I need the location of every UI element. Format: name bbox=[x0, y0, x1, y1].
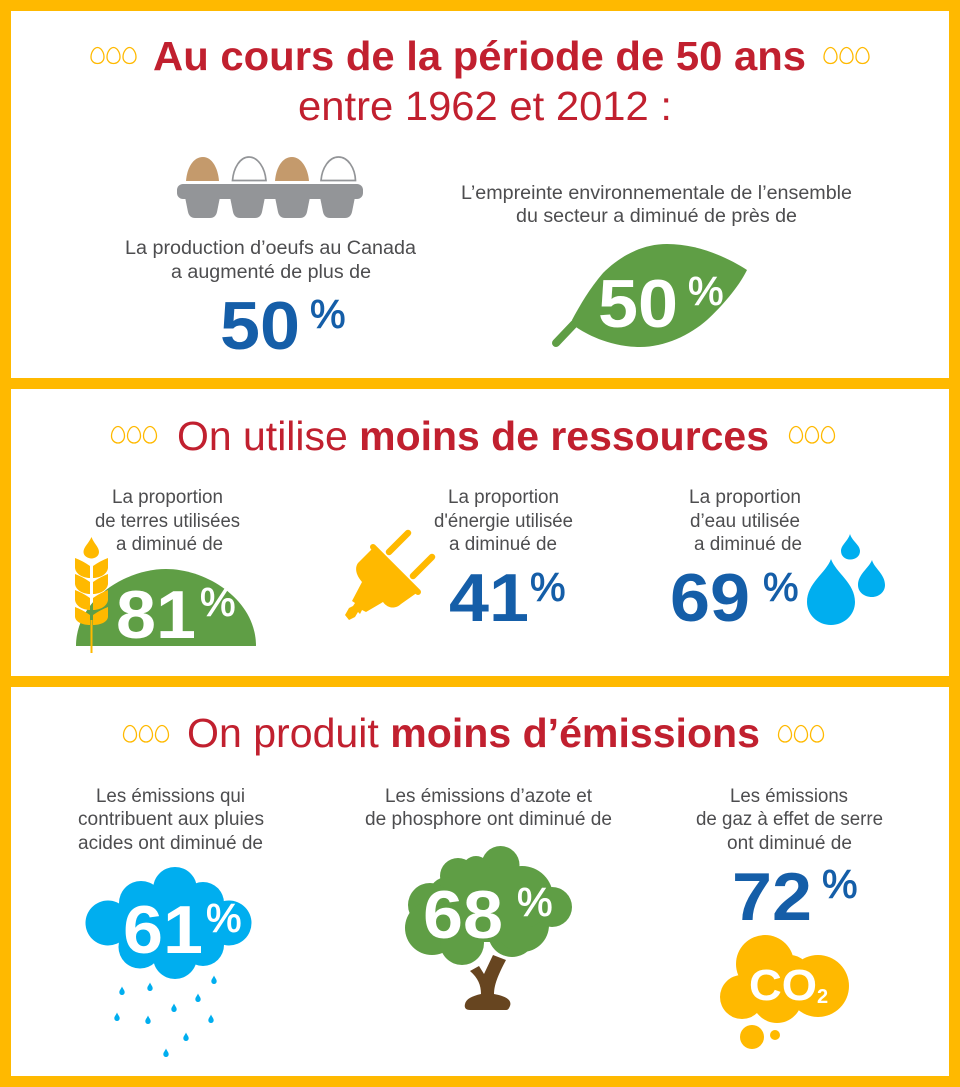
icon: wheat bbox=[75, 537, 108, 653]
text: water use: La proportion bbox=[689, 487, 801, 508]
icon: CO2 cloud: 2 bbox=[817, 986, 828, 1008]
text: greenhouse gas emissions: ont diminué de bbox=[727, 833, 852, 854]
stat: 69 percent: 69 bbox=[670, 560, 750, 636]
text: acid rain emissions: Les émissions qui bbox=[96, 786, 245, 807]
icon: raindrops bbox=[114, 976, 217, 1057]
stat: 50 percent production: % bbox=[310, 293, 346, 337]
icon: rain cloud with 61 percent bbox=[86, 867, 252, 979]
stat: 41 percent: % bbox=[530, 566, 566, 610]
text: egg production bbox=[125, 238, 416, 283]
text: land use bbox=[95, 487, 240, 555]
text: water use: d’eau utilisée bbox=[690, 511, 800, 532]
icon: three eggs right of heading bbox=[778, 726, 824, 742]
stat: 72 percent: 72 bbox=[732, 859, 812, 935]
stat: 72 percent: % bbox=[822, 863, 858, 907]
text: land use: de terres utilisées bbox=[95, 511, 240, 532]
stat: 41 percent bbox=[449, 560, 566, 636]
heading: fewer emissions: On produit moins d’émissions bbox=[187, 710, 760, 756]
icon: CO2 cloud: CO bbox=[749, 961, 817, 1010]
text: acid rain emissions: contribuent aux pluies bbox=[78, 809, 264, 830]
panel: overview bbox=[11, 11, 949, 378]
text: energy use: La proportion bbox=[448, 487, 559, 508]
stat: 69 percent bbox=[670, 560, 799, 636]
icon: leaf with 50 percent: 50 bbox=[598, 266, 678, 342]
stat: 50 percent production: 50 bbox=[220, 288, 300, 364]
text: nitrogen and phosphorus emissions: Les émissions d’azote et bbox=[385, 786, 593, 807]
text: energy use: d'énergie utilisée bbox=[434, 511, 573, 532]
panel: fewer resources bbox=[11, 389, 949, 676]
icon: rain cloud with 61 percent: 61 bbox=[123, 892, 203, 968]
text: energy use: a diminué de bbox=[449, 534, 557, 555]
text: nitrogen and phosphorus emissions bbox=[365, 786, 612, 830]
text: land use: a diminué de bbox=[116, 534, 223, 555]
text: environmental footprint: du secteur a diminué de près de bbox=[516, 206, 797, 227]
text: water use bbox=[689, 487, 802, 555]
text: land use: La proportion bbox=[112, 487, 223, 508]
icon: green hill with 81 percent: 81 bbox=[116, 577, 196, 653]
icon: tree with 68 percent: % bbox=[517, 881, 553, 925]
text: environmental footprint: L’empreinte environnementale de l’ensemble bbox=[461, 183, 852, 204]
text: acid rain emissions: acides ont diminué de bbox=[78, 833, 263, 854]
title line two: entre 1962 et 2012 : bbox=[298, 83, 672, 129]
icon: green hill with 81 percent bbox=[76, 569, 256, 653]
icon: three eggs left of heading bbox=[124, 726, 168, 742]
text: greenhouse gas emissions: Les émissions bbox=[730, 786, 848, 807]
stat: 50 percent production bbox=[220, 288, 346, 364]
text: nitrogen and phosphorus emissions: de phosphore ont diminué de bbox=[365, 809, 612, 830]
icon: CO2 cloud bbox=[720, 935, 849, 1049]
text: acid rain emissions bbox=[78, 786, 264, 854]
text: greenhouse gas emissions bbox=[696, 786, 883, 854]
text: greenhouse gas emissions: de gaz à effet de serre bbox=[696, 809, 883, 830]
icon: green hill with 81 percent: % bbox=[200, 581, 236, 625]
panel: fewer emissions bbox=[11, 687, 949, 1076]
title line one: Au cours de la période de 50 ans bbox=[153, 33, 806, 79]
text: environmental footprint bbox=[461, 183, 852, 227]
text: egg production: a augmenté de plus de bbox=[171, 262, 371, 283]
icon: leaf with 50 percent bbox=[556, 244, 747, 347]
text: water use: a diminué de bbox=[694, 534, 802, 555]
icon: three eggs right of title bbox=[824, 48, 869, 64]
icon: tree with 68 percent bbox=[405, 846, 572, 1010]
icon: tree with 68 percent: 68 bbox=[423, 877, 503, 953]
icon: water drops bbox=[807, 534, 885, 625]
stat: 72 percent bbox=[732, 859, 858, 935]
icon: rain cloud with 61 percent: % bbox=[206, 897, 242, 941]
icon: leaf with 50 percent: % bbox=[688, 270, 724, 314]
heading: fewer resources: On utilise moins de ressources bbox=[177, 413, 769, 459]
icon: three eggs right of heading bbox=[790, 426, 834, 443]
icon: egg carton bbox=[177, 157, 363, 218]
text: energy use bbox=[434, 487, 573, 555]
stat: 69 percent: % bbox=[763, 566, 799, 610]
icon: electric plug bbox=[345, 533, 432, 620]
stat: 41 percent: 41 bbox=[449, 560, 529, 636]
icon: three eggs left of title bbox=[91, 48, 136, 64]
text: egg production: La production d’oeufs au Canada bbox=[125, 238, 416, 259]
icon: three eggs left of heading bbox=[112, 426, 156, 443]
